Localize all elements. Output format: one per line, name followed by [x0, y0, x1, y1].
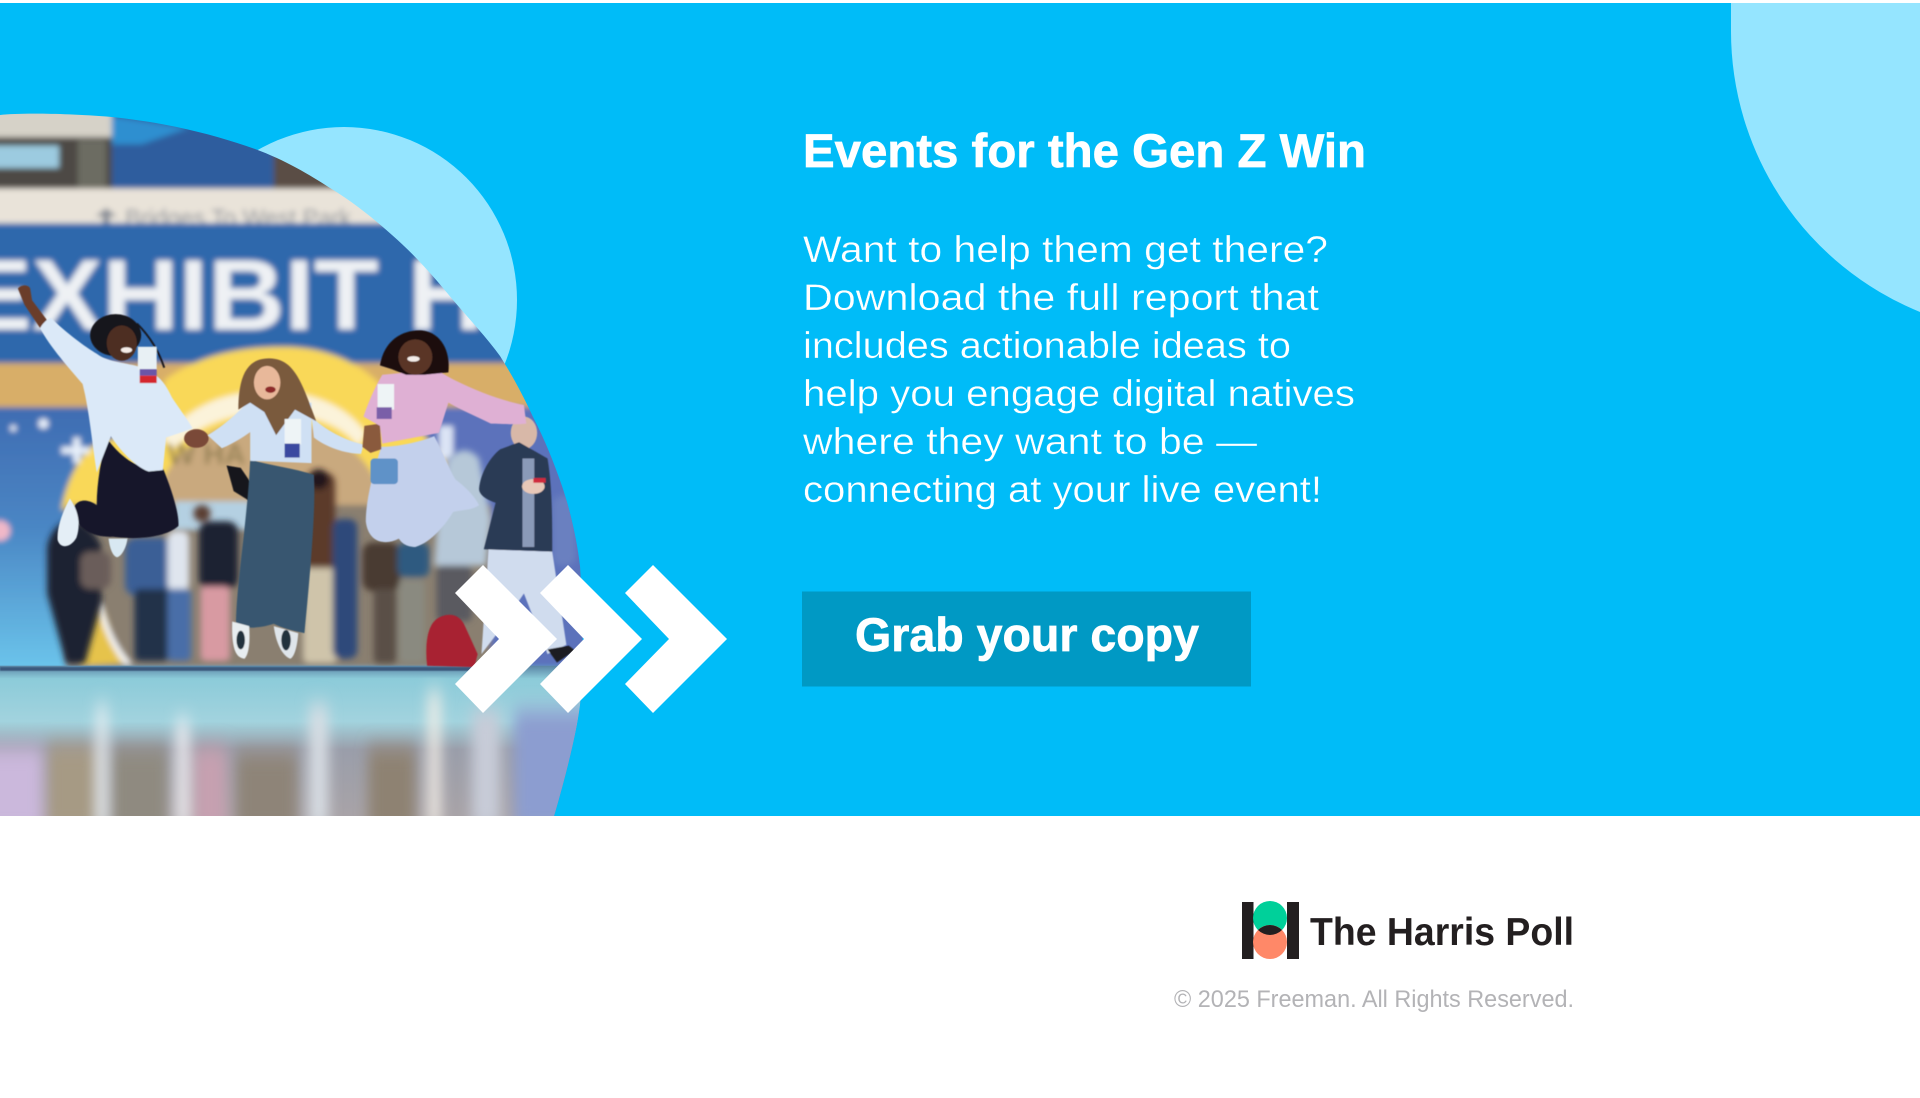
photo: attendees jumping in front of exhibit hall banner: [0, 114, 583, 816]
photo: jumping woman in pink shirt: [362, 330, 526, 547]
photo: man with phone at right: [479, 417, 575, 662]
photo background: venue architecture: Bridges To West Park: [125, 205, 351, 231]
photo background: venue architecture: [0, 114, 583, 816]
body text: [802, 229, 1355, 510]
copyright line: © 2025 Freeman. All Rights Reserved.: [1174, 986, 1574, 1013]
photo: person arm behind centre figure: [227, 465, 250, 501]
photo: reflective floor: [0, 666, 580, 816]
call to action button: [802, 592, 1251, 686]
photo: jumping woman in white shirt: [18, 285, 209, 557]
decorative corner circle: [1731, 3, 1920, 312]
body text: where they want to be —: [802, 421, 1257, 462]
photo background: venue architecture: W HA: [168, 439, 246, 471]
blue background band: [0, 3, 1920, 816]
photo: jumping woman in blue top: [208, 358, 363, 659]
body text: connecting at your live event!: [803, 469, 1322, 510]
chevron 2: [540, 565, 642, 713]
body text: includes actionable ideas to: [803, 325, 1291, 366]
light blue blob behind photo: [171, 127, 517, 473]
call to action button: Grab your copy: [855, 608, 1199, 661]
body text: help you engage digital natives: [803, 373, 1355, 414]
The Harris Poll logo: [1242, 901, 1574, 959]
chevron 3: [625, 565, 727, 713]
The Harris Poll logo: The Harris Poll: [1310, 911, 1574, 954]
body text: Want to help them get there?: [803, 229, 1328, 270]
body text: Download the full report that: [803, 277, 1320, 318]
arrow chevrons: [455, 565, 727, 713]
chevron 1: [455, 565, 557, 713]
heading: Events for the Gen Z Win: [803, 124, 1366, 177]
photo: blurred crowd: [47, 450, 576, 663]
photo: red backpack: [426, 615, 478, 667]
